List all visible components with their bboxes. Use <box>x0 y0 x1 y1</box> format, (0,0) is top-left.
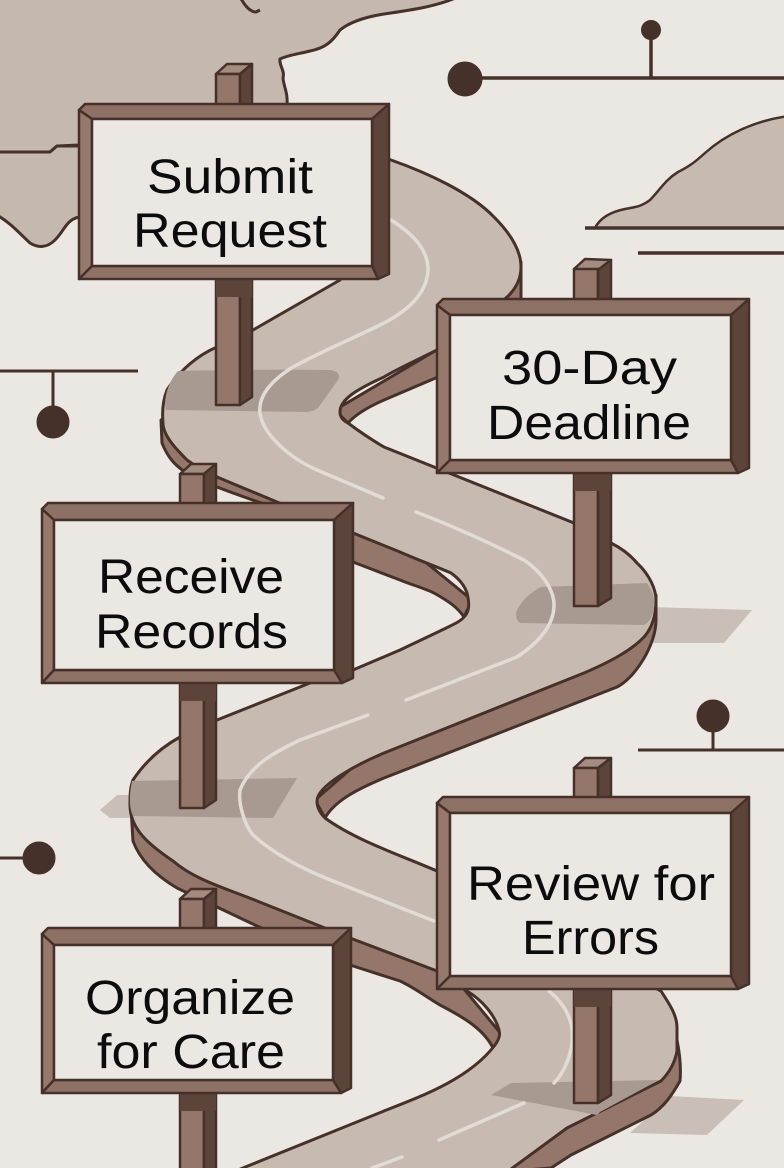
label: for Care <box>97 1026 285 1079</box>
post <box>180 464 216 808</box>
post <box>574 259 611 606</box>
label <box>133 151 327 258</box>
label <box>95 551 288 659</box>
sign: Receive Records <box>42 464 353 808</box>
road surface <box>130 150 677 1168</box>
sign: Submit Request <box>79 64 389 405</box>
node line: top right <box>448 20 784 96</box>
road side walls <box>131 262 680 1168</box>
board <box>437 299 749 473</box>
road shadows from sign posts <box>130 370 659 1115</box>
post <box>216 64 252 405</box>
ground shadows <box>100 607 752 1135</box>
label: Deadline <box>487 397 691 450</box>
board <box>437 797 749 989</box>
land: top left terrain <box>0 0 462 246</box>
sign: Review for Errors <box>437 758 749 1103</box>
winding road <box>130 150 680 1168</box>
sign: 30-Day Deadline <box>437 259 749 606</box>
node line: left upper <box>0 371 138 438</box>
label <box>487 342 691 450</box>
land: right hill <box>585 116 784 253</box>
board <box>42 503 353 683</box>
label: Records <box>95 606 288 659</box>
label: Organize <box>85 972 295 1025</box>
label <box>85 972 295 1079</box>
road centre line <box>240 220 572 1168</box>
sign: Organize for Care <box>42 889 351 1168</box>
node line: left lower <box>0 842 55 874</box>
label: Submit <box>147 151 313 204</box>
post <box>180 889 216 1168</box>
label <box>467 858 715 965</box>
label: Review for <box>467 858 715 911</box>
label: Request <box>133 205 327 258</box>
label: Receive <box>98 551 284 604</box>
board <box>42 928 351 1093</box>
label: 30-Day <box>502 342 677 395</box>
label: Errors <box>522 912 659 965</box>
node line: right lower <box>638 700 784 750</box>
post <box>574 758 611 1103</box>
board <box>79 104 389 279</box>
